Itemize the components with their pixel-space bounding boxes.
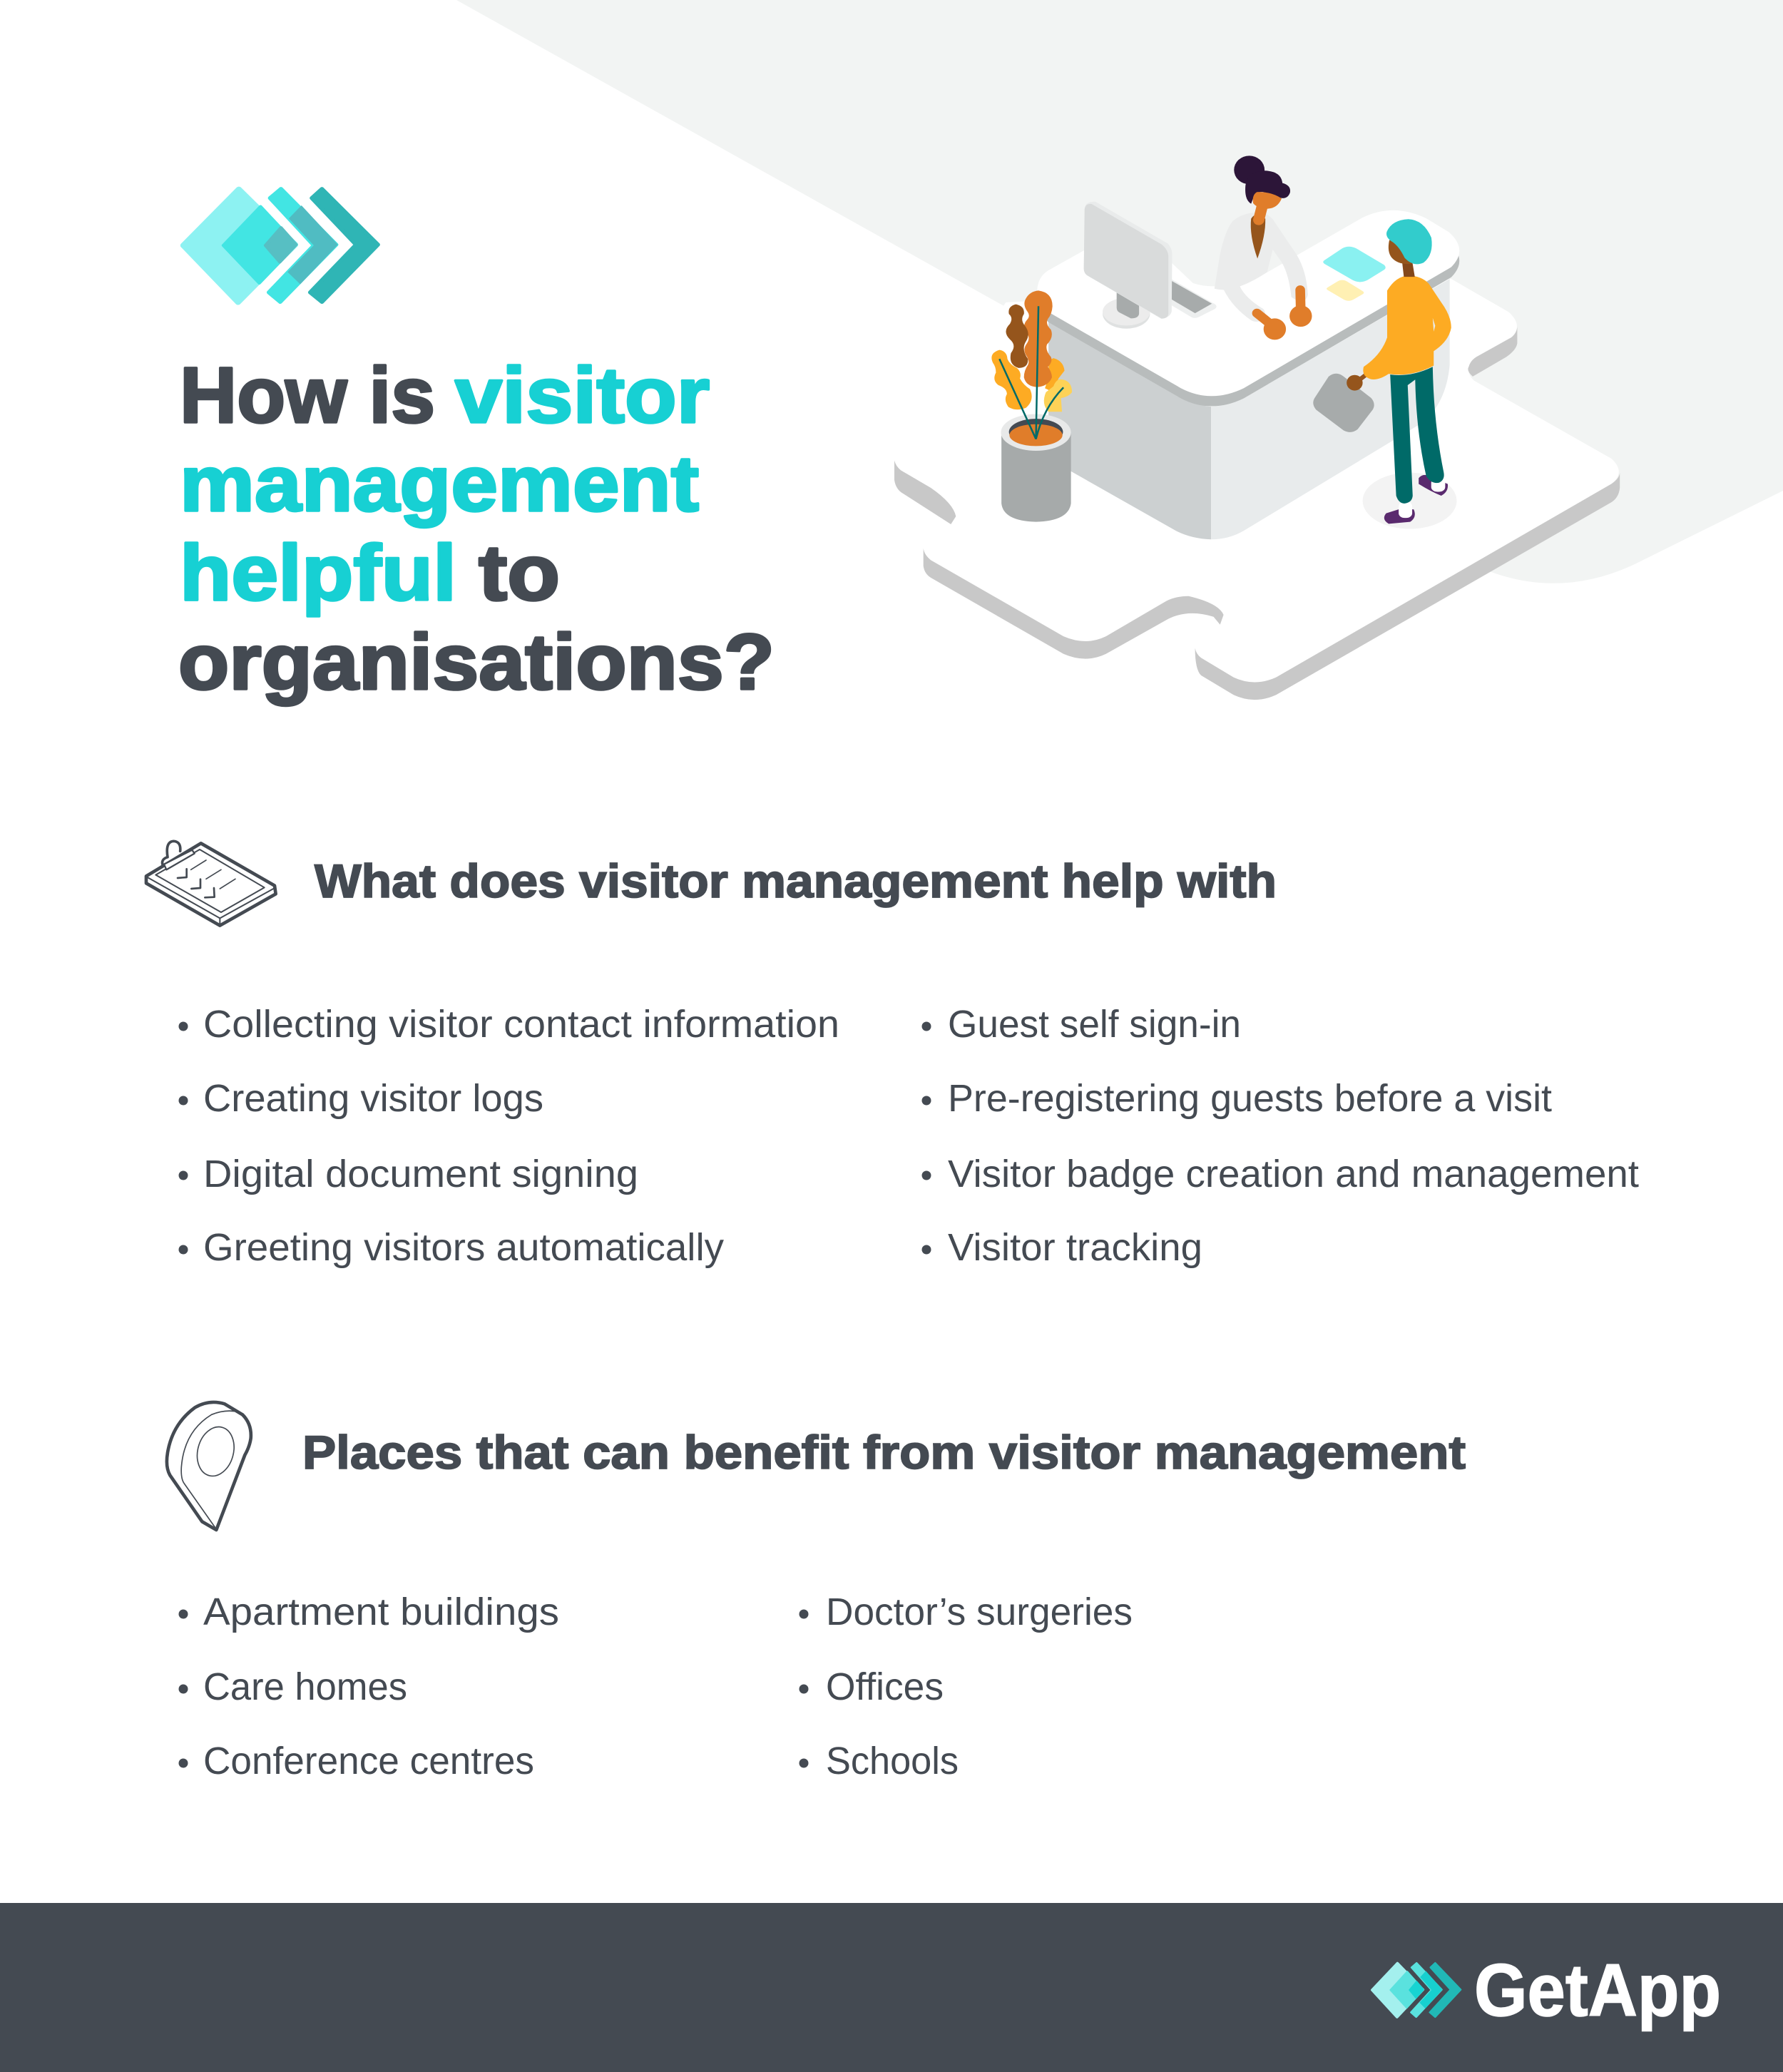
list: places, right column: Schools	[826, 1740, 959, 1782]
title: visitor	[455, 352, 710, 439]
list: visitor management help, right column: Visitor tracking	[948, 1226, 1202, 1269]
illustration: reception desk on puzzle piece	[894, 155, 1620, 700]
list: visitor management help, right column	[921, 1003, 1639, 1269]
list: places, right column: Offices	[826, 1665, 944, 1708]
list: places, left column: Care homes	[203, 1665, 407, 1708]
logo mark	[183, 189, 378, 302]
title: How is	[180, 352, 435, 439]
visitor figure	[1313, 219, 1457, 529]
computer monitor and keyboard	[1084, 202, 1217, 329]
list: visitor management help, right column: Guest self sign-in	[948, 1003, 1241, 1046]
list: visitor management help, left column: Greeting visitors automatically	[203, 1226, 724, 1269]
title: to	[479, 529, 560, 617]
icon: clipboard	[146, 841, 276, 926]
list: visitor management help, left column: Creating visitor logs	[203, 1077, 543, 1120]
title: helpful	[180, 529, 456, 617]
background shape	[456, 0, 1783, 583]
title: organisations?	[178, 618, 775, 706]
list: visitor management help, left column	[178, 1003, 839, 1269]
list: places, left column: Apartment buildings	[203, 1591, 559, 1633]
reception desk	[1037, 210, 1459, 539]
footer wordmark: GetApp	[1474, 1949, 1721, 2032]
receptionist	[1215, 155, 1312, 340]
title: management	[180, 440, 699, 528]
puzzle platform	[894, 279, 1620, 700]
list: visitor management help, right column: Visitor badge creation and management	[948, 1153, 1639, 1195]
potted plant	[991, 290, 1072, 522]
list: places, right column	[799, 1591, 1133, 1782]
list: places, left column	[178, 1591, 559, 1782]
title	[178, 352, 775, 706]
list: places, right column: Doctor’s surgeries	[826, 1591, 1133, 1633]
list: visitor management help, left column: Digital document signing	[203, 1153, 638, 1195]
heading: what does visitor management help with: What does visitor management help with	[315, 854, 1277, 907]
icon: location pin	[167, 1402, 251, 1530]
heading: places that can benefit: Places that can benefit from visitor management	[302, 1426, 1466, 1479]
list: places, left column: Conference centres	[203, 1740, 534, 1782]
list: visitor management help, right column: Pre-registering guests before a visit	[948, 1077, 1552, 1120]
list: visitor management help, left column: Collecting visitor contact information	[203, 1003, 839, 1046]
papers on desk	[1323, 247, 1386, 301]
footer band	[0, 1903, 1783, 2072]
footer logo mark	[1372, 1963, 1461, 2017]
